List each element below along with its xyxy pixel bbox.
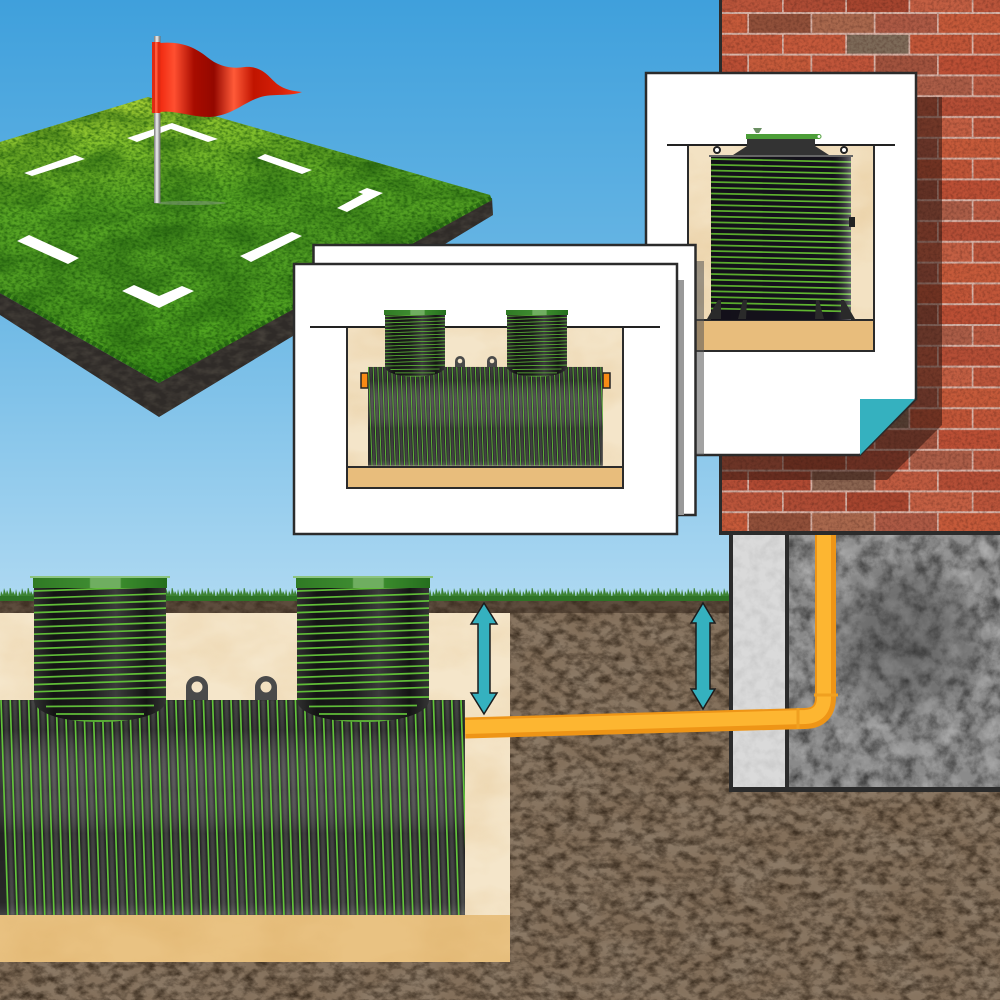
green lid (746, 128, 821, 139)
right small riser (506, 310, 568, 377)
main horizontal tank (0, 700, 493, 915)
flag pole shadow (154, 201, 226, 205)
back sheet shadow (696, 261, 704, 455)
orange drain pipe (465, 535, 838, 729)
left small riser (384, 310, 446, 377)
main sand pit (0, 613, 510, 962)
sheet (646, 73, 916, 455)
document: back sheet (314, 245, 704, 515)
grass strip at ground level (0, 588, 730, 601)
document: vertical tank diagram (646, 73, 942, 480)
pit (688, 145, 874, 351)
left riser (30, 576, 170, 722)
top lugs (714, 147, 847, 153)
soil edge (0, 190, 500, 420)
red flag (152, 42, 302, 117)
brick wall (719, 0, 1000, 535)
ground soil (0, 601, 1000, 1000)
white plot markers (17, 123, 383, 308)
small lugs (455, 356, 497, 367)
left riser lid (30, 576, 170, 588)
ground line (310, 326, 660, 328)
tank feet (707, 300, 855, 319)
depth arrow near tank (471, 603, 497, 714)
pit (347, 327, 623, 488)
ground line (667, 144, 895, 146)
sand base layer (0, 915, 510, 962)
right riser lid (293, 576, 433, 588)
lifting lug right (255, 676, 277, 700)
tank top hub (733, 139, 829, 155)
concrete foundation wall (729, 533, 1000, 792)
right riser (293, 576, 433, 722)
depth arrow near wall (691, 603, 715, 709)
turf surface (0, 95, 495, 385)
sheet (294, 264, 677, 534)
sky background (0, 0, 1000, 602)
vertical tank (709, 155, 853, 320)
side port (849, 217, 855, 227)
front sheet shadow (677, 280, 684, 515)
flag pole (154, 36, 160, 203)
horizontal tank (368, 367, 617, 466)
grass plot platform (0, 36, 500, 420)
folded corner (860, 399, 915, 455)
document shadow on wall (722, 97, 942, 480)
lifting lug left (186, 676, 208, 700)
document: horizontal tank diagram (294, 264, 677, 534)
outlet stubs (361, 373, 610, 388)
